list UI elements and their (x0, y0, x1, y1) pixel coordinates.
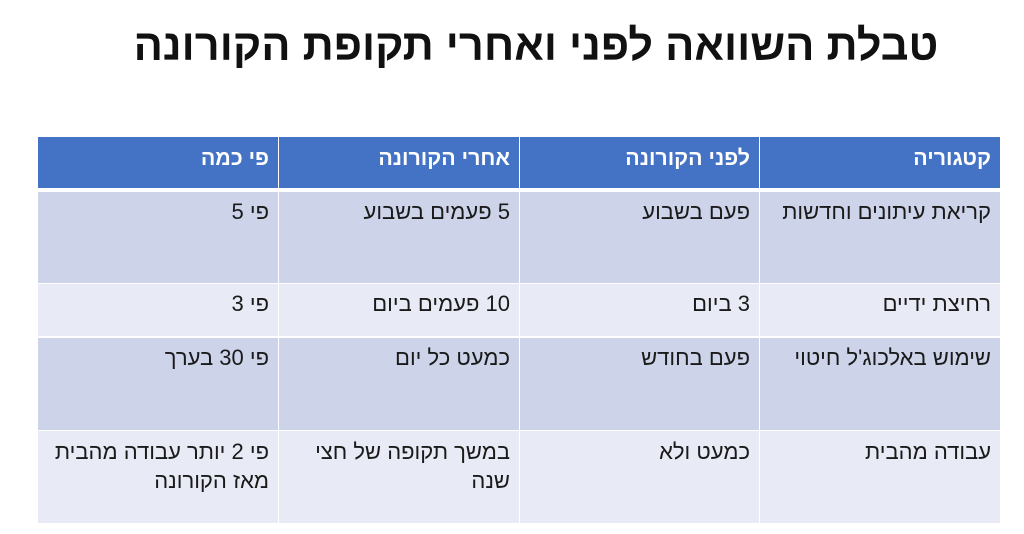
title: טבלת השוואה לפני ואחרי תקופת הקורונה (134, 22, 938, 70)
row 4 multiple (38, 431, 278, 523)
row 1 after (279, 192, 519, 283)
header: before corona: לפני הקורונה (625, 146, 750, 170)
header: how many times (38, 137, 278, 188)
header: after corona (279, 137, 519, 188)
row 1 before: פעם בשבוע (642, 199, 750, 224)
row 1 multiple (38, 192, 278, 283)
row 2 category (760, 284, 1000, 336)
header: category (760, 137, 1000, 188)
row 4 multiple: פי 2 יותר עבודה מהבית מאז הקורונה (55, 439, 269, 493)
row 2 before: 3 ביום (692, 291, 750, 316)
row 2 multiple (38, 284, 278, 336)
row 4 category: עבודה מהבית (865, 439, 991, 464)
row 1 after: 5 פעמים בשבוע (364, 199, 510, 224)
row 3 before (520, 338, 759, 430)
row 4 after (279, 431, 519, 523)
row 3 after: כמעט כל יום (395, 345, 510, 370)
row 3 multiple (38, 338, 278, 430)
row 4 before: כמעט ולא (659, 439, 750, 464)
row 3 before: פעם בחודש (641, 345, 750, 370)
row 1 before (520, 192, 759, 283)
row 4 after: במשך תקופה של חצי שנה (315, 439, 510, 493)
header: before corona (520, 137, 759, 188)
header: after corona: אחרי הקורונה (378, 146, 510, 170)
row 1 multiple: פי 5 (232, 199, 269, 224)
row 3 after (279, 338, 519, 430)
row 2 after: 10 פעמים ביום (372, 291, 510, 316)
row 1 category: קריאת עיתונים וחדשות (782, 199, 991, 224)
header: category: קטגוריה (913, 146, 991, 170)
row 4 before (520, 431, 759, 523)
row 2 before (520, 284, 759, 336)
row 3 multiple: פי 30 בערך (165, 345, 269, 370)
comparison table (38, 137, 1000, 523)
row 2 after (279, 284, 519, 336)
row 2 category: רחיצת ידיים (883, 291, 991, 316)
row 3 category: שימוש באלכוג'ל חיטוי (794, 345, 991, 370)
row 3 category (760, 338, 1000, 430)
row 2 multiple: פי 3 (232, 291, 269, 316)
row 4 category (760, 431, 1000, 523)
row 1 category (760, 192, 1000, 283)
header: how many times: פי כמה (201, 146, 269, 170)
